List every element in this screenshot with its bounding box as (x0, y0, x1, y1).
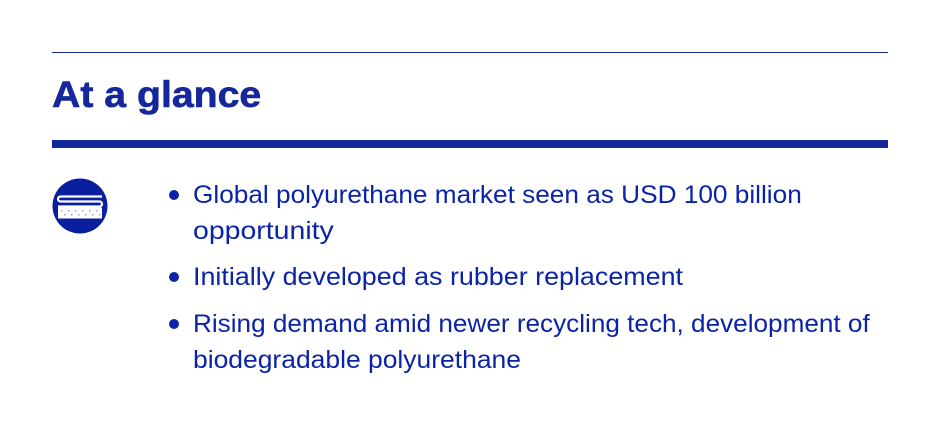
bullet list (169, 181, 870, 374)
thick rule (52, 140, 888, 148)
bullet text block 3: Rising demand amid newer recycling tech, development of (193, 310, 870, 338)
bullet text block 3 (169, 310, 870, 374)
bullet text block 1: opportunity (193, 217, 334, 245)
bullet text block 3: biodegradable polyurethane (193, 346, 521, 374)
bullet text block 2: Initially developed as rubber replacement (193, 263, 683, 291)
icon: mattress foam (52, 178, 108, 234)
bullet text block 1 (169, 181, 802, 245)
top rule (52, 52, 888, 53)
title: At a glance (52, 74, 261, 115)
bullet text block 1: Global polyurethane market seen as USD 100 billion (193, 181, 802, 209)
